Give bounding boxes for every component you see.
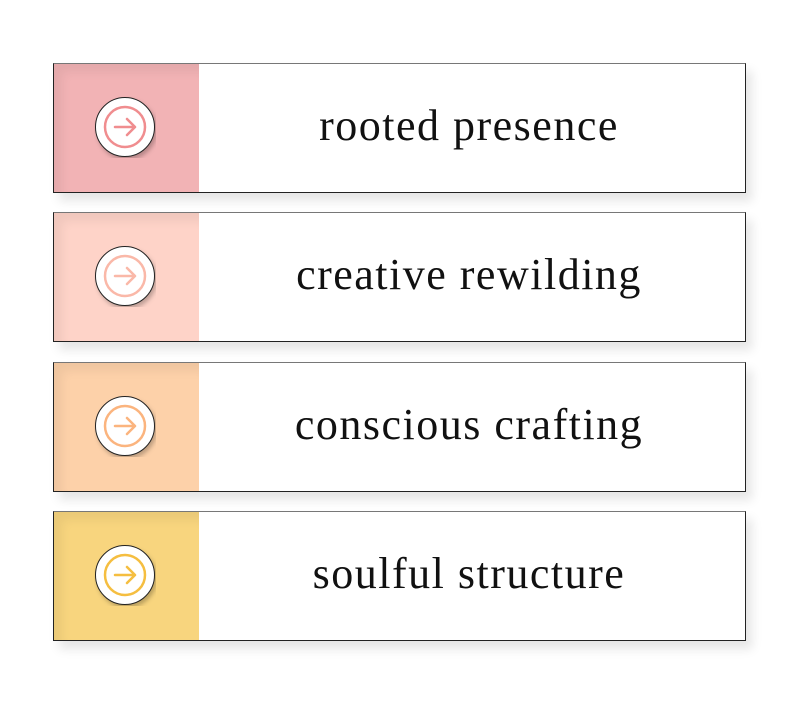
icon: arrow circle [94,246,156,307]
icon: arrow circle [94,545,156,606]
icon: arrow circle [94,396,156,457]
label: soulful structure [313,549,625,598]
panel: soulful structure [53,511,746,641]
panel: rooted presence [53,63,746,193]
color block [54,213,199,341]
label: rooted presence [319,101,619,150]
color block [54,64,199,192]
color block [54,512,199,640]
panel: conscious crafting [53,362,746,492]
panel: creative rewilding [53,212,746,342]
icon: arrow circle [94,97,156,158]
label: creative rewilding [296,250,642,299]
label: conscious crafting [295,400,643,449]
color block [54,363,199,491]
